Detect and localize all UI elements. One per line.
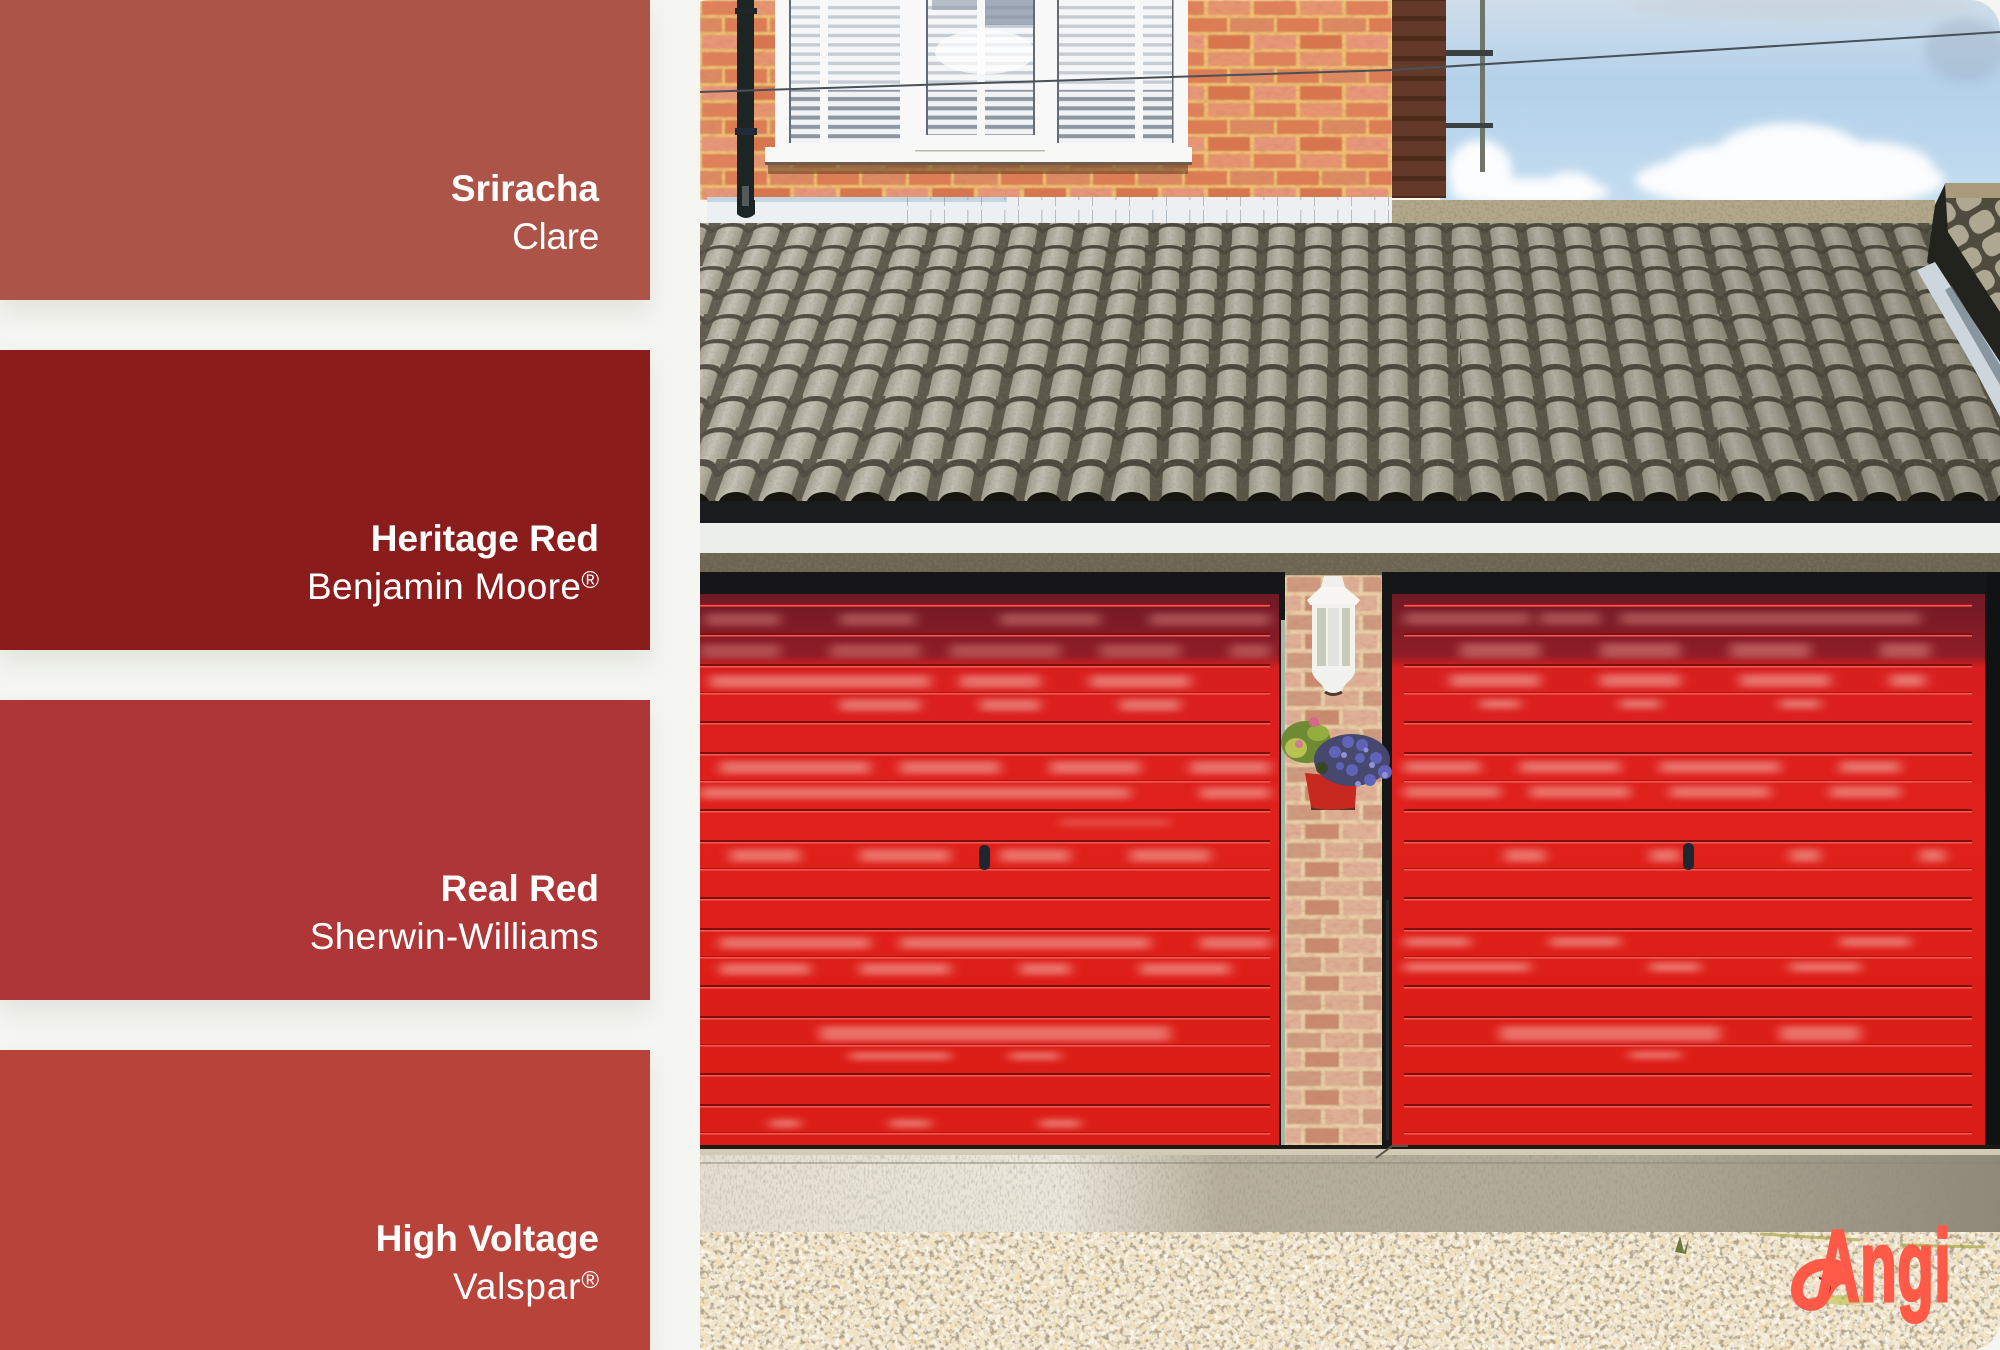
upper brick wall [700,0,1392,200]
color name: High Voltage: High Voltage [376,1218,599,1259]
tan roof parapet [1392,200,1935,224]
color name: Heritage Red: Heritage Red [371,518,599,559]
window with blinds [765,0,1192,174]
concrete lintel [700,553,2000,577]
panel: Real Red swatch [0,700,650,1000]
concrete apron [700,1145,2000,1237]
Angi logo [1791,1226,1948,1324]
dark brick chimney pillar [1392,0,1446,198]
brand: Valspar: Valspar® [453,1266,599,1307]
sky with clouds [1440,0,2000,210]
photo: house with two red garage doors [700,0,2000,1350]
white flashing above roof [707,197,1392,223]
left door handle [979,845,990,870]
black downpipe [735,0,757,218]
antenna pole [1446,0,1493,172]
left door paint fade marks [700,613,1270,1128]
white fascia board [700,523,2000,553]
brand: Clare: Clare [512,216,599,257]
color name: Sriracha: Sriracha [451,168,599,209]
panel: High Voltage swatch [0,1050,650,1350]
panel: Heritage Red swatch [0,350,650,650]
left garage door [700,572,1285,1152]
brand: Sherwin-Williams: Sherwin-Williams [310,916,599,957]
overhead wire [700,32,2000,92]
pale door frame strips [1281,620,1389,1150]
tiled roof [700,223,2000,501]
black gutter with brackets [700,501,2000,523]
right garage door [1382,572,2000,1152]
color name: Real Red: Real Red [441,868,599,909]
right door handle [1683,843,1694,870]
brand: Benjamin Moore: Benjamin Moore® [307,566,599,607]
right door paint fade marks [1404,612,1945,1059]
gravel driveway [700,1232,2000,1350]
panel: Sriracha swatch [0,0,650,300]
hanging flower basket [1281,717,1392,810]
right roof hip with flashing [1917,183,2000,417]
brick pillar between doors [1285,575,1382,1157]
wall lantern [1307,576,1360,694]
